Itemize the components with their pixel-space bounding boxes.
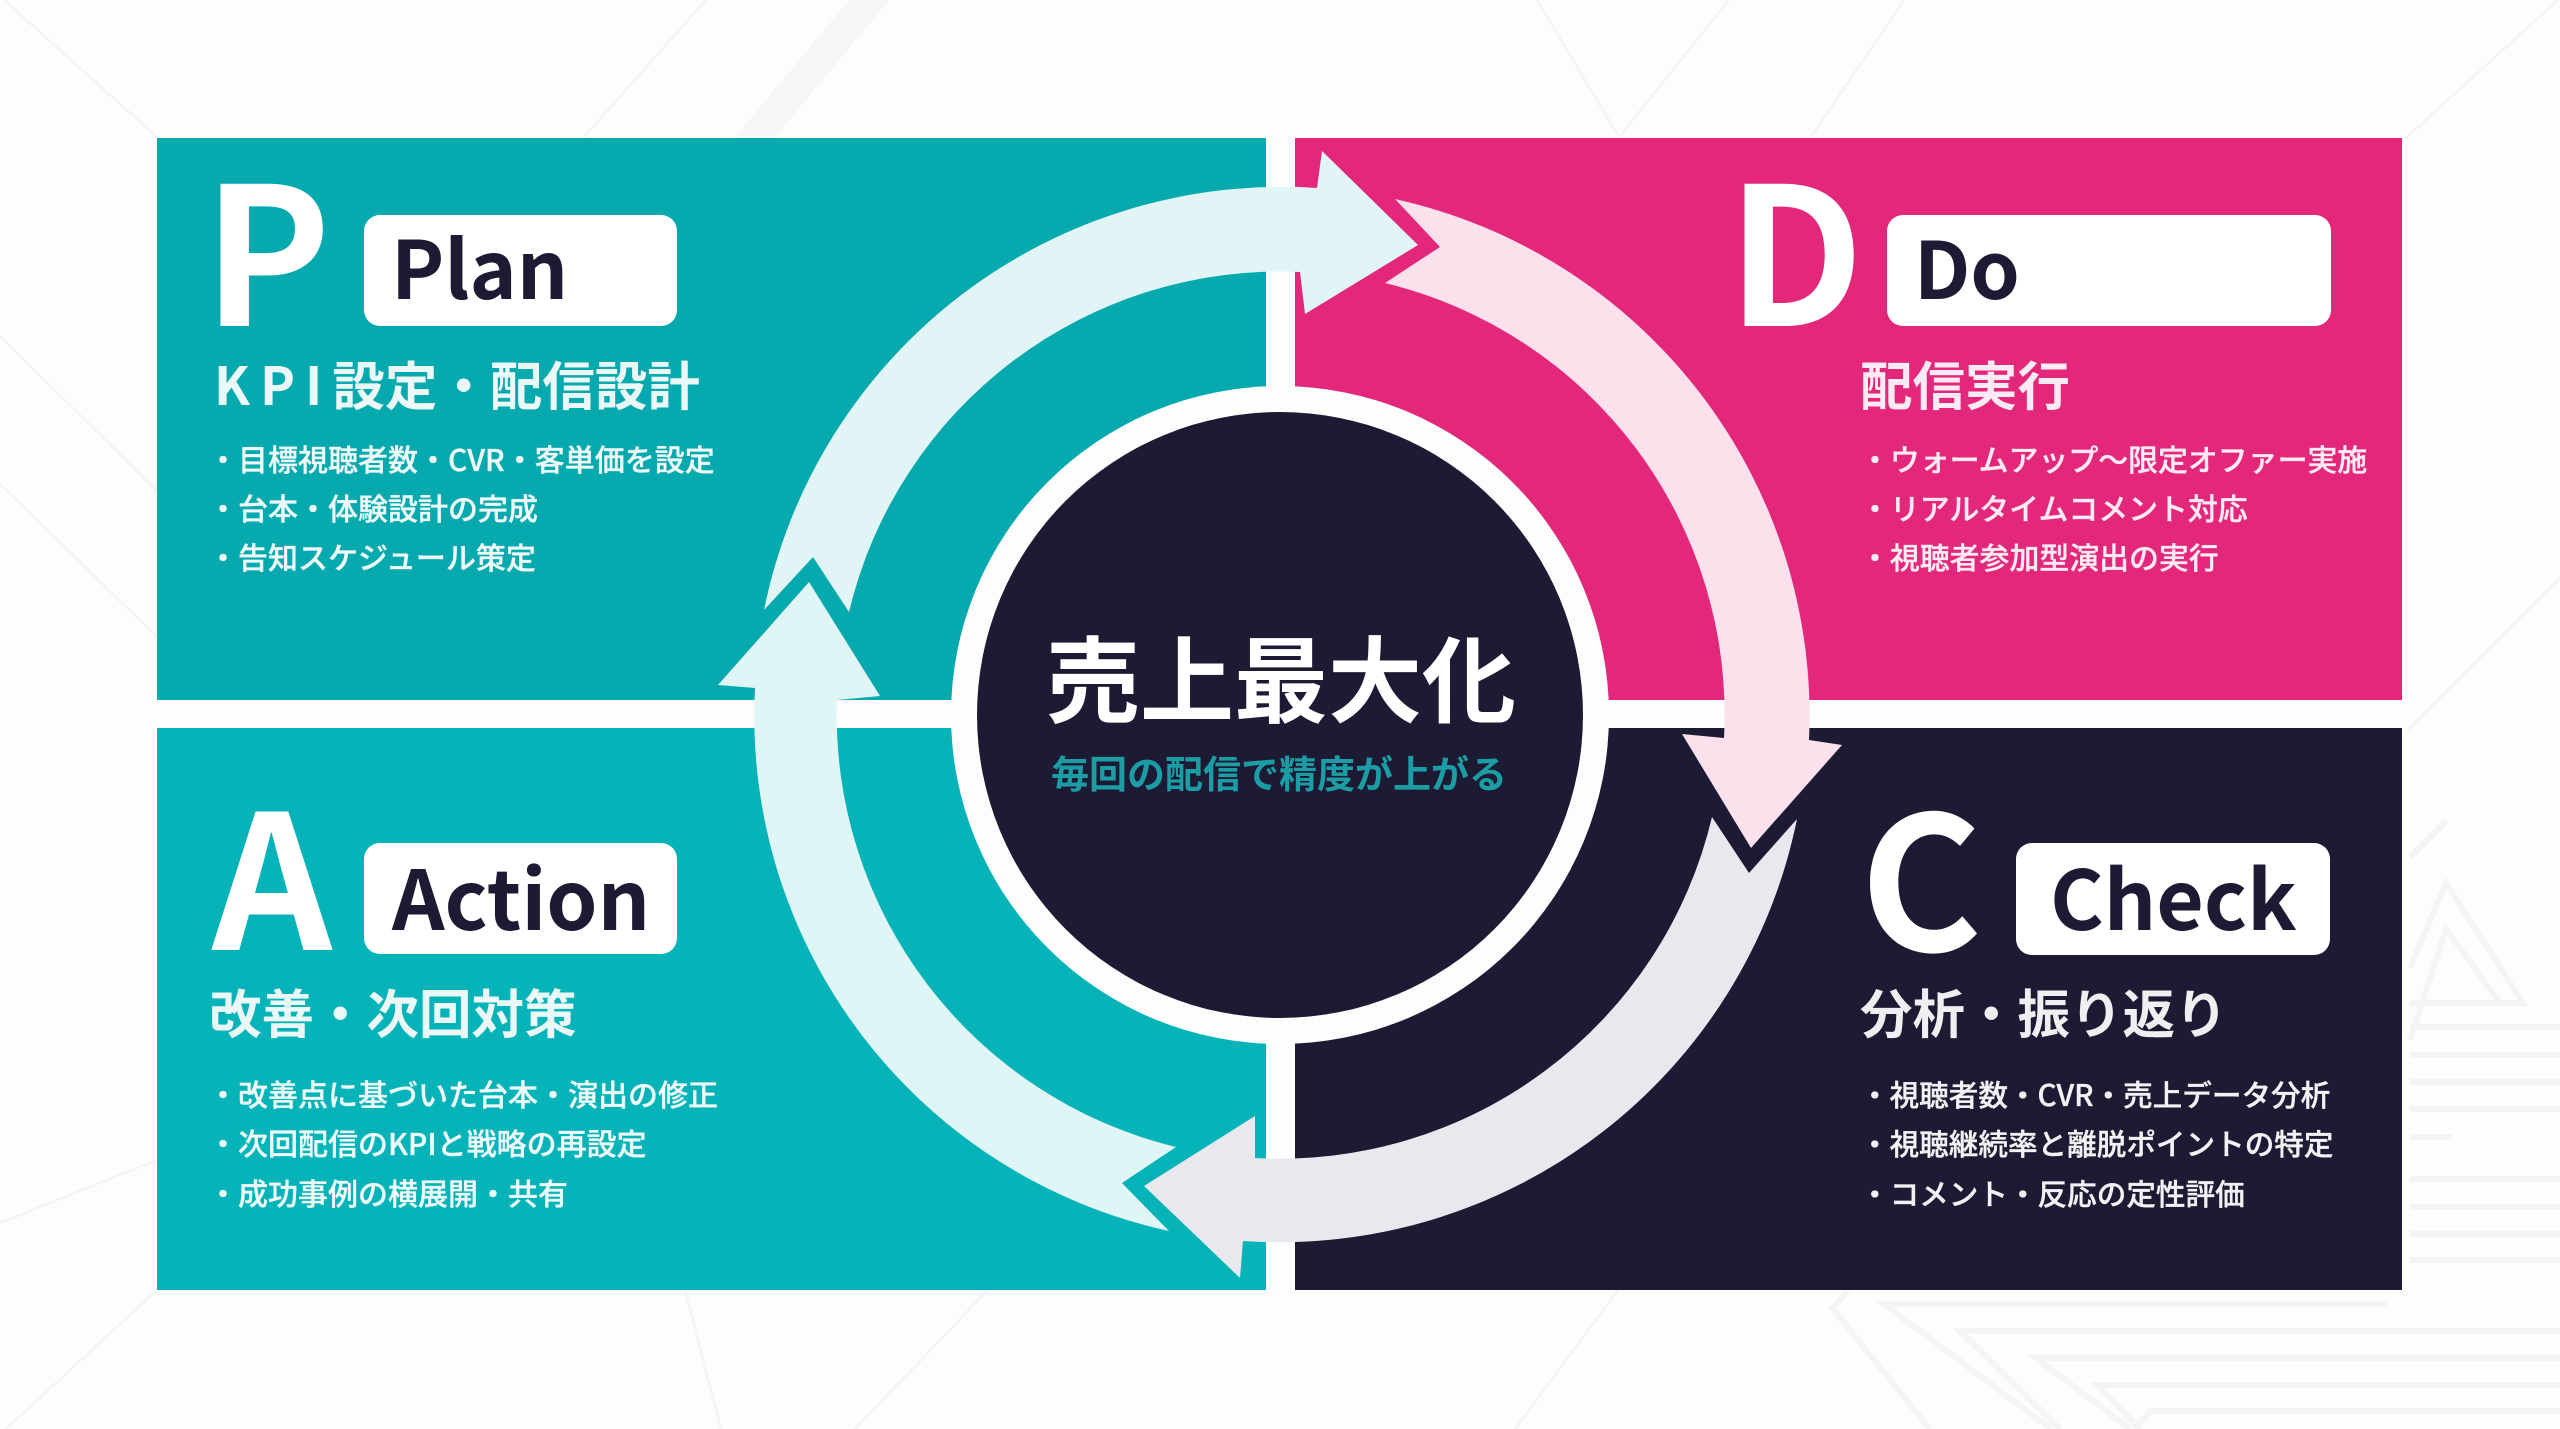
list: Do items: ・視聴者参加型演出の実行 xyxy=(1860,534,2219,578)
panel: Check xyxy=(1295,728,2402,1290)
panel: Do xyxy=(1295,104,2402,700)
list: Action items: ・改善点に基づいた台本・演出の修正 xyxy=(208,1071,718,1115)
list: Check items: ・コメント・反応の定性評価 xyxy=(1860,1171,2245,1214)
label: Check: Check xyxy=(2050,835,2297,954)
arrow: Plan to Do xyxy=(764,151,1418,612)
arrow: Do to Check xyxy=(1385,199,1842,848)
label: Do: Do xyxy=(1914,207,2020,322)
list: Check items xyxy=(1860,1072,2334,1214)
heading: 分析・振り返り: 分析・振り返り xyxy=(1860,973,2228,1049)
list: Plan items xyxy=(208,436,715,578)
panel: Plan xyxy=(157,104,1266,700)
letter D: D xyxy=(1727,104,1864,382)
label: Do xyxy=(1887,207,2331,326)
label: Plan xyxy=(364,207,677,326)
list: Action items xyxy=(208,1071,718,1214)
panel: Action xyxy=(157,728,1266,1290)
list: Check items: ・視聴継続率と離脱ポイントの特定 xyxy=(1860,1121,2334,1164)
list: Do items xyxy=(1860,436,2367,578)
letter P: P xyxy=(203,104,331,382)
list: Action items: ・次回配信のKPIと戦略の再設定 xyxy=(208,1120,647,1164)
heading: 改善・次回対策: 改善・次回対策 xyxy=(209,973,577,1049)
list: Do items: ・ウォームアップ〜限定オファー実施 xyxy=(1860,436,2367,480)
list: Do items: ・リアルタイムコメント対応 xyxy=(1860,485,2248,529)
list: Plan items: ・台本・体験設計の完成 xyxy=(208,485,538,529)
center circle xyxy=(951,386,1609,1044)
list: Check items: ・視聴者数・CVR・売上データ分析 xyxy=(1860,1072,2330,1115)
label: Action: Action xyxy=(391,835,650,954)
arrow: Action to Plan xyxy=(718,582,1176,1231)
heading: KPI設定・配信設計: KPI設定・配信設計 xyxy=(214,345,700,421)
center subtitle: 毎回の配信で精度が上がる xyxy=(1051,744,1507,799)
label: Plan: Plan xyxy=(391,207,568,323)
arrow: Check to Action xyxy=(1144,817,1797,1278)
heading: 配信実行: 配信実行 xyxy=(1860,345,2070,421)
center title: 売上最大化 xyxy=(1046,607,1516,743)
list: Plan items: ・目標視聴者数・CVR・客単価を設定 xyxy=(208,436,715,480)
letter A: A xyxy=(211,733,333,1004)
letter C: C xyxy=(1860,735,1982,1005)
list: Action items: ・成功事例の横展開・共有 xyxy=(208,1170,568,1214)
list: Plan items: ・告知スケジュール策定 xyxy=(208,534,536,578)
